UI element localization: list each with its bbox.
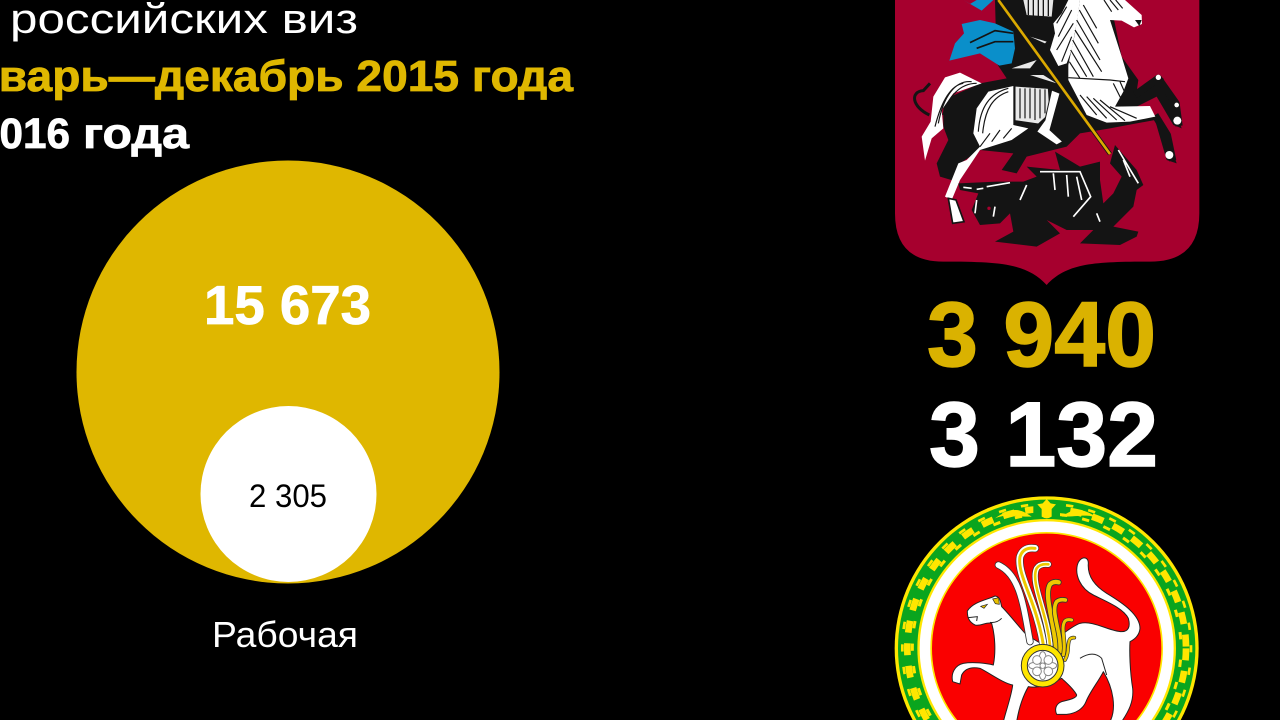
horse mane	[1050, 0, 1080, 66]
value: 2016: 2 305	[249, 478, 327, 514]
dragon eye	[987, 207, 991, 210]
dragon	[958, 145, 1143, 247]
horse hatching	[1068, 0, 1137, 121]
top leaves	[995, 510, 1098, 518]
rider boot	[1037, 90, 1063, 145]
horse head	[1102, 0, 1142, 27]
cloak folds	[970, 31, 1013, 48]
horse eye and nostril	[1135, 20, 1142, 26]
cloak	[949, 0, 1015, 66]
saddle	[1015, 86, 1050, 124]
tail	[922, 73, 982, 161]
value: 2015: 15 673	[204, 274, 371, 336]
leopard muzzle and jaw	[968, 617, 1107, 675]
heading: 2016	[0, 110, 190, 158]
outer ring	[895, 496, 1199, 720]
icon: coat of arms of Moscow	[895, 0, 1199, 285]
circle: 2015 value	[76, 160, 500, 584]
spear	[998, 0, 1110, 154]
haunch shading	[978, 88, 1012, 147]
wheel	[1021, 644, 1064, 687]
chart: work visas nested circles	[76, 160, 500, 584]
top tulip	[1037, 499, 1056, 518]
rear hoof	[948, 198, 964, 223]
horse neck and chest	[1068, 0, 1155, 123]
icon: coat of arms of Tatarstan	[895, 496, 1199, 720]
ring ornament	[907, 509, 1186, 720]
wing feathers	[998, 548, 1074, 660]
chart label: work: Рабочая	[212, 614, 358, 655]
value: Moscow 2015: 3 940	[927, 284, 1156, 386]
horse hindquarters	[945, 86, 1028, 200]
red field	[932, 534, 1161, 720]
tail curl	[915, 83, 930, 115]
heading: 2016: года	[83, 110, 190, 158]
horse raised legs	[1135, 78, 1179, 161]
top green gap	[1033, 500, 1060, 521]
leopard ear and eye	[981, 598, 999, 608]
leopard	[952, 558, 1140, 720]
dragon highlights	[963, 150, 1138, 222]
horse and rider silhouette	[937, 0, 1182, 182]
circle: 2016 value	[200, 406, 376, 582]
shield	[895, 0, 1199, 285]
wheel petals	[1029, 652, 1057, 680]
front hooves	[1156, 75, 1161, 80]
white ring	[917, 519, 1176, 720]
rider armour highlights	[1012, 0, 1057, 83]
value: Moscow 2016: 3 132	[929, 384, 1158, 486]
